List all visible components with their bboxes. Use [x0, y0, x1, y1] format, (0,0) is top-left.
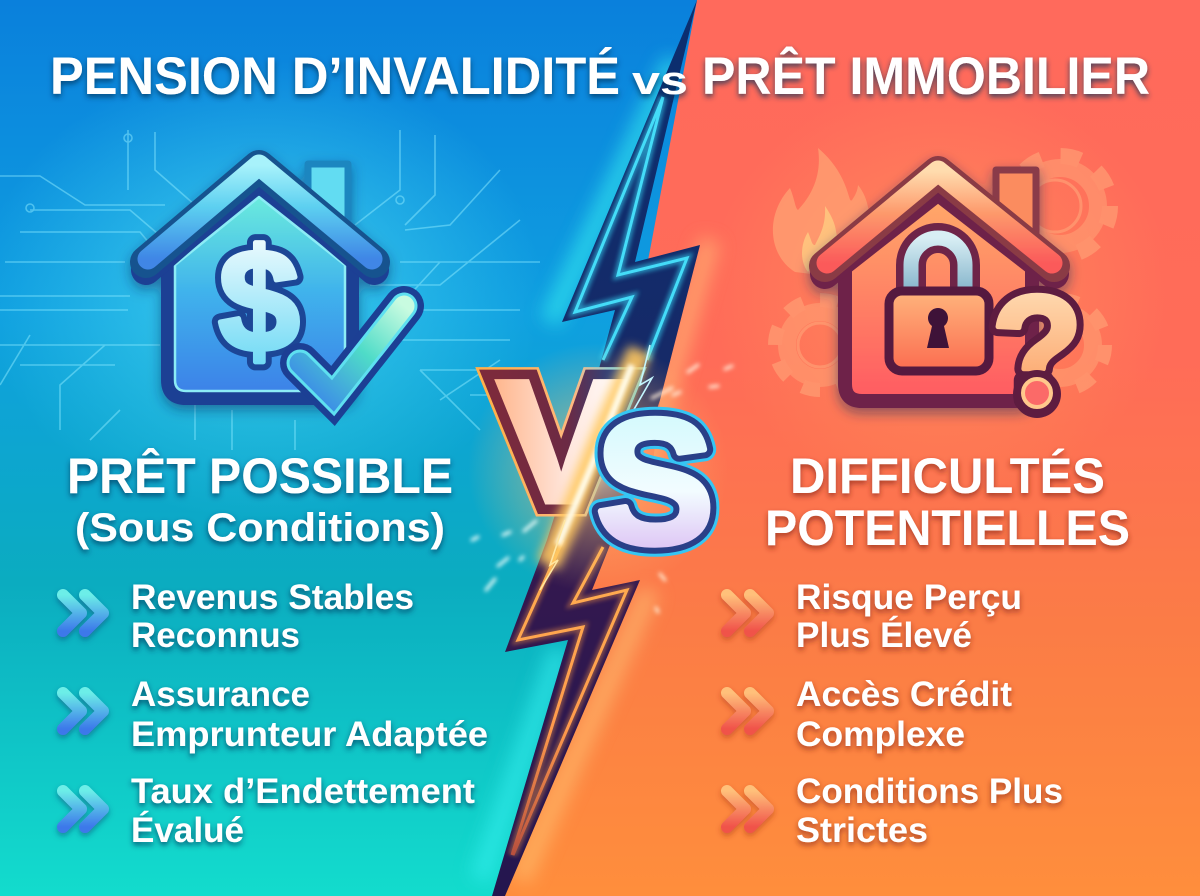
letter V: V: [497, 343, 625, 539]
flame: large: [773, 148, 872, 275]
dollar sign: $: [218, 219, 300, 382]
panel: left column heading: [67, 448, 453, 550]
item 3: Taux d’Endettement: [131, 772, 475, 811]
icon: chevrons 2: [727, 693, 768, 729]
background: orange side: [497, 0, 1200, 896]
title: [50, 45, 1150, 106]
item 2: [796, 675, 1012, 754]
panel: left column heading: (Sous Conditions): [75, 506, 445, 550]
letter S: S: [596, 382, 714, 581]
icon: chevrons 3: [63, 791, 103, 827]
gears and flames behind the lock house: [773, 148, 1110, 390]
sparks: [472, 365, 732, 612]
lightning bolt divider: [480, 0, 710, 896]
panel: right column heading: DIFFICULTÉS: [790, 448, 1105, 504]
item 1: [131, 578, 414, 655]
keyhole: [927, 308, 949, 348]
panel: right column heading: [765, 448, 1130, 556]
icon: chevrons 3: [727, 791, 768, 827]
item 2: Emprunteur Adaptée: [131, 715, 488, 754]
item 2: Assurance: [131, 675, 310, 714]
VS badge: [468, 343, 732, 612]
neon blue outline: [575, 97, 687, 360]
question mark: ?: [991, 264, 1083, 432]
circuit pattern: [0, 130, 540, 450]
panel: right list: [727, 578, 1063, 850]
icon: chevrons 1: [63, 595, 103, 631]
item 1: Risque Perçu: [796, 578, 1022, 617]
panel: left list: [63, 578, 488, 850]
roof: [825, 171, 1054, 274]
item 3: [796, 772, 1063, 850]
icon: house with dollar and check mark: [146, 164, 404, 398]
item 3: Évalué: [131, 810, 244, 850]
item 2: Accès Crédit: [796, 675, 1012, 714]
chimney: [308, 164, 348, 245]
gear: lower right: [1015, 300, 1105, 390]
item 1: Revenus Stables: [131, 578, 414, 617]
title: PRÊT IMMOBILIER: [702, 45, 1150, 106]
chimney: [996, 170, 1036, 250]
letter S: S: [596, 382, 714, 581]
flame: small: [802, 206, 838, 272]
title: vs: [632, 59, 688, 103]
check mark: [300, 306, 404, 396]
letter S: S: [596, 382, 714, 581]
letter V: V: [497, 343, 625, 539]
neon orange outline: [512, 540, 627, 855]
panel: right column heading: POTENTIELLES: [765, 500, 1130, 556]
item 2: Complexe: [796, 715, 965, 754]
item 1: Plus Élevé: [796, 615, 972, 655]
house body: [845, 195, 1032, 401]
gear: lower left: [775, 300, 865, 390]
item 2: [131, 675, 488, 754]
dollar sign: $: [218, 219, 300, 382]
icon: house with padlock and question mark: [825, 170, 1083, 432]
item 1: [796, 578, 1022, 655]
letter V: V: [497, 343, 625, 539]
gear: top right: [1010, 156, 1110, 256]
item 3: Conditions Plus: [796, 772, 1063, 811]
background: blue side: [0, 0, 697, 896]
item 1: Reconnus: [131, 616, 300, 655]
item 3: [131, 772, 475, 850]
icon: chevrons 1: [727, 595, 768, 631]
center lightning streak: [540, 345, 652, 590]
roof: [146, 165, 374, 270]
icon: chevrons 2: [63, 693, 103, 729]
question mark: ?: [991, 264, 1083, 432]
house body: [168, 188, 352, 398]
item 3: Strictes: [796, 811, 928, 850]
padlock: [889, 238, 989, 371]
title: PENSION D’INVALIDITÉ: [50, 46, 620, 106]
panel: left column heading: PRÊT POSSIBLE: [67, 448, 453, 504]
